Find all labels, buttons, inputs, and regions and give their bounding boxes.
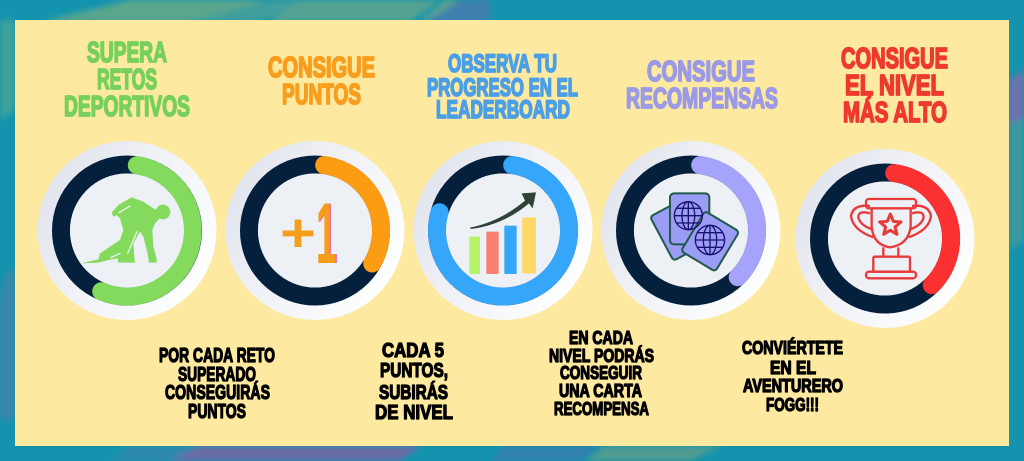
heading: consigue puntos	[268, 52, 375, 111]
heading: consigue el nivel más alto: CONSIGUE	[841, 43, 948, 75]
heading: consigue recompensas: RECOMPENSAS	[626, 83, 778, 115]
caption: en cada nivel: NIVEL PODRÁS	[549, 345, 654, 366]
heading: consigue recompensas: CONSIGUE	[647, 56, 755, 88]
caption: por cada reto: SUPERADO	[178, 364, 256, 386]
caption: en cada nivel: UNA CARTA	[559, 381, 642, 401]
caption: conviértete: FOGG!!!	[766, 395, 819, 415]
heading: observa tu progreso en el leaderboard: LEADERBOARD	[436, 96, 570, 124]
heading: supera retos deportivos	[64, 37, 190, 123]
caption: cada 5 puntos	[375, 340, 453, 424]
caption: por cada reto	[159, 345, 275, 423]
caption: conviértete: CONVIÉRTETE	[742, 337, 843, 358]
caption: conviértete: AVENTURERO	[743, 376, 843, 396]
heading: observa tu progreso en el leaderboard: OBSERVA TU	[448, 50, 557, 78]
caption: cada 5 puntos: PUNTOS,	[380, 360, 448, 382]
caption: en cada nivel: CONSEGUIR	[560, 363, 642, 383]
caption: por cada reto: CONSEGUIRÁS	[165, 381, 270, 404]
heading: consigue recompensas	[626, 56, 778, 115]
heading: consigue puntos: PUNTOS	[282, 79, 361, 111]
caption: conviértete	[742, 337, 843, 415]
caption: en cada nivel: RECOMPENSA	[554, 399, 649, 419]
heading: consigue puntos: CONSIGUE	[268, 52, 375, 84]
icon: reward cards with globes	[650, 193, 739, 272]
heading: consigue el nivel más alto: MÁS ALTO	[843, 95, 947, 129]
heading: observa tu progreso en el leaderboard: PROGRESO EN EL	[427, 74, 578, 102]
step 1 progress ring	[38, 141, 216, 320]
step 3 progress ring	[414, 141, 592, 320]
caption: por cada reto: PUNTOS	[188, 401, 246, 423]
caption: en cada nivel	[549, 328, 654, 419]
caption: cada 5 puntos: DE NIVEL	[375, 402, 453, 424]
caption: conviértete: EN EL	[770, 358, 816, 378]
icon: plus one: +	[280, 203, 316, 263]
step 2 progress ring	[226, 141, 404, 320]
icon: sprinter on starting blocks	[81, 197, 170, 263]
heading: consigue el nivel más alto	[841, 43, 948, 129]
caption: en cada nivel: EN CADA	[569, 328, 633, 348]
heading: consigue el nivel más alto: EL NIVEL	[845, 70, 944, 102]
icon: trophy	[851, 199, 931, 278]
icon: plus one	[280, 186, 338, 282]
heading: supera retos deportivos: DEPORTIVOS	[64, 91, 190, 123]
caption: cada 5 puntos: CADA 5	[382, 340, 444, 362]
icon: rising bar chart	[469, 192, 536, 274]
heading: supera retos deportivos: RETOS	[97, 64, 157, 96]
step 2 progress ring: 1	[317, 186, 338, 282]
step 5 progress ring	[796, 149, 974, 328]
step 2 progress ring: 1	[316, 186, 336, 282]
heading: supera retos deportivos: SUPERA	[87, 37, 167, 69]
caption: por cada reto: POR CADA RETO	[159, 345, 275, 367]
heading: observa tu progreso en el leaderboard	[427, 50, 578, 124]
step 4 progress ring	[602, 141, 780, 320]
caption: cada 5 puntos: SUBIRÁS	[379, 381, 448, 404]
